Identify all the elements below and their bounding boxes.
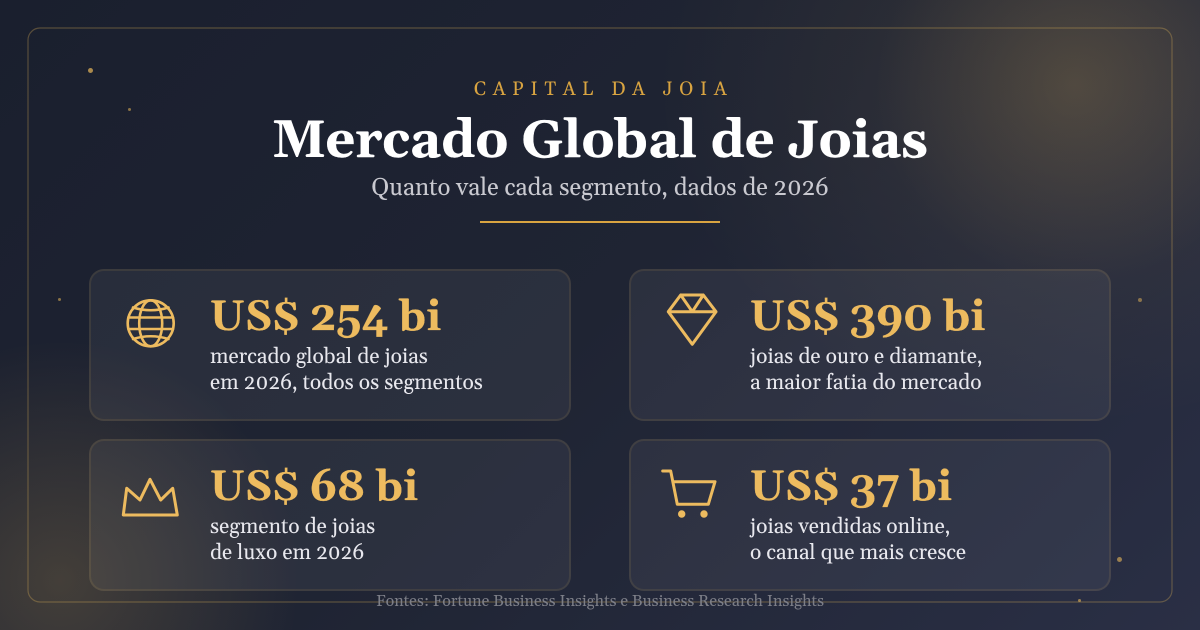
description xyxy=(210,515,375,567)
eyebrow: CAPITAL DA JOIA xyxy=(474,78,733,102)
description: de luxo em 2026 xyxy=(210,541,364,567)
icon: shopping cart xyxy=(661,470,716,518)
description: joias vendidas online, xyxy=(750,515,950,541)
description xyxy=(750,345,983,397)
source footer: Fontes: Fortune Business Insights e Business Research Insights xyxy=(376,592,824,612)
panel: online xyxy=(629,439,1111,591)
description: a maior fatia do mercado xyxy=(750,371,982,397)
description xyxy=(210,345,483,397)
value: US$ 37 bi xyxy=(750,462,952,515)
subtitle: Quanto vale cada segmento, dados de 2026 xyxy=(371,174,829,204)
description: mercado global de joias xyxy=(210,345,428,371)
description xyxy=(750,515,966,567)
panel: global market xyxy=(89,269,571,421)
value: US$ 390 bi xyxy=(750,292,985,345)
icon: globe xyxy=(126,299,175,348)
description: segmento de joias xyxy=(210,515,375,541)
panel: gold and diamond xyxy=(629,269,1111,421)
description: o canal que mais cresce xyxy=(750,541,966,567)
value: US$ 68 bi xyxy=(210,462,418,515)
panel: luxury xyxy=(89,439,571,591)
title: Mercado Global de Joias xyxy=(272,109,928,175)
description: em 2026, todos os segmentos xyxy=(210,371,483,397)
title divider xyxy=(480,221,720,223)
description: joias de ouro e diamante, xyxy=(750,345,983,371)
value: US$ 254 bi xyxy=(210,292,441,345)
icon: crown xyxy=(122,478,179,516)
icon: diamond xyxy=(666,293,718,346)
